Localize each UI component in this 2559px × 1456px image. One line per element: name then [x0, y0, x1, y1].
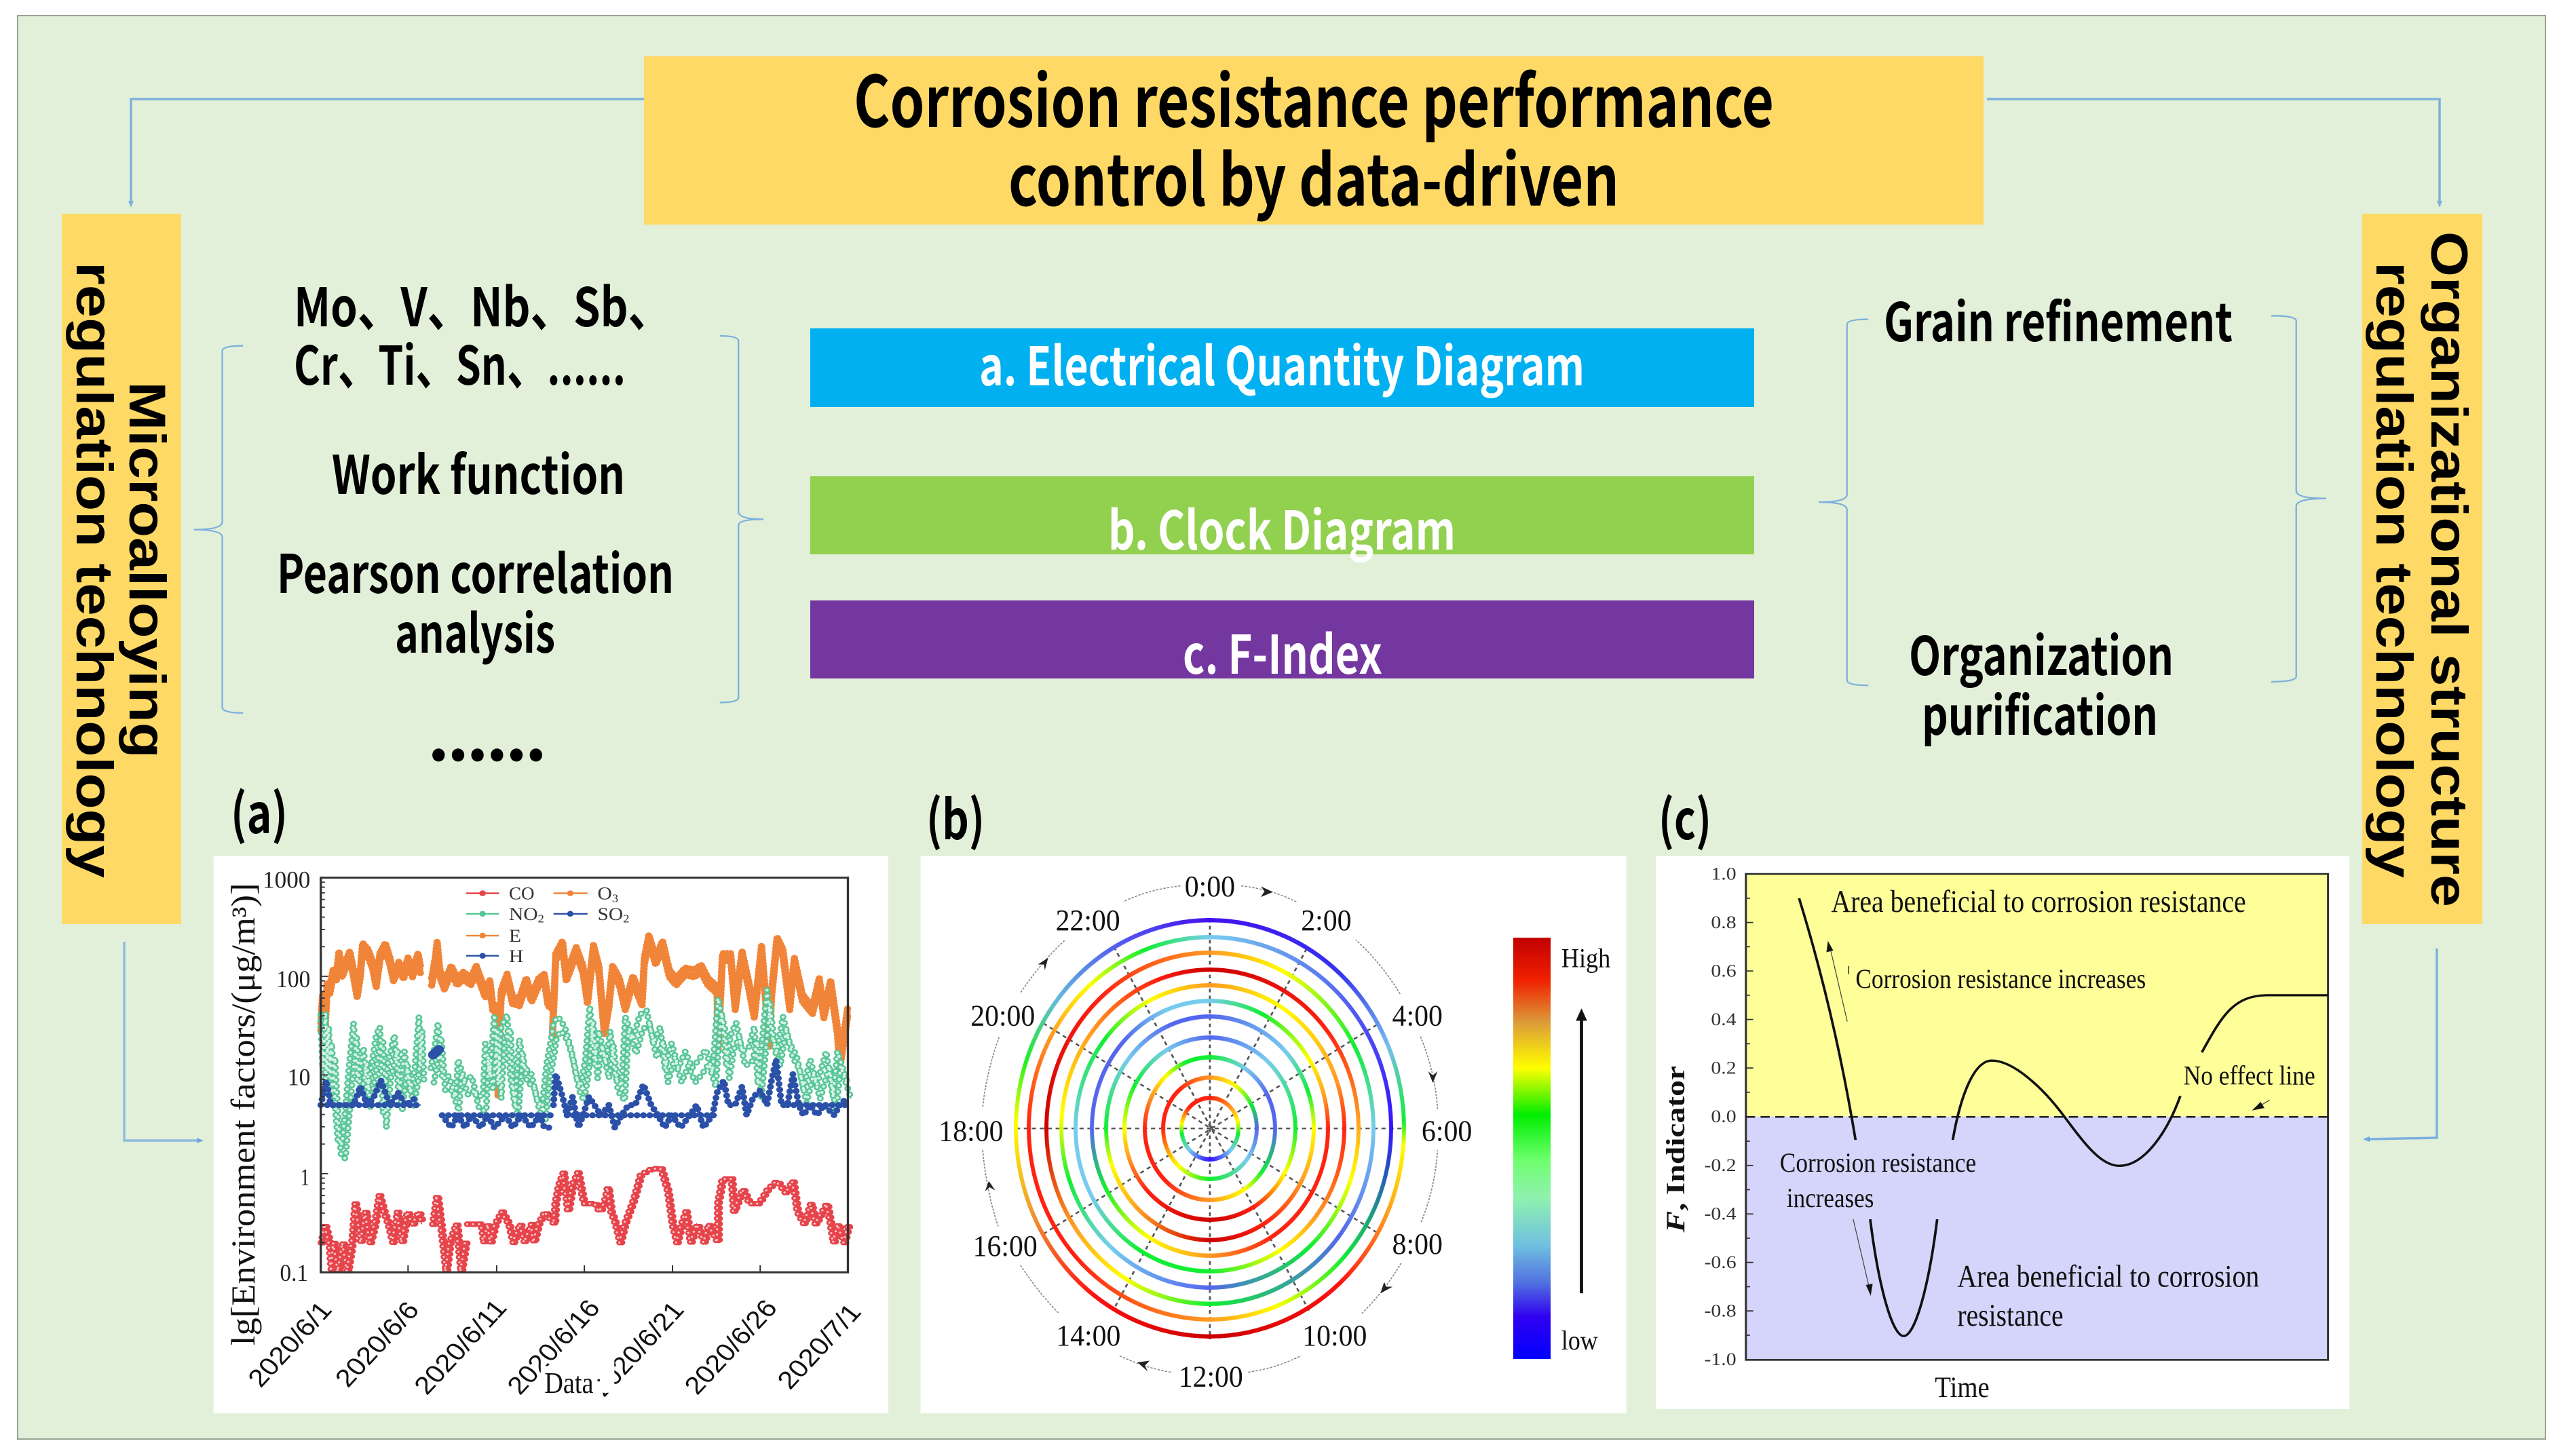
bar: clock diagram: b. Clock Diagram	[1108, 489, 1456, 565]
beneficial area lavender	[1746, 1117, 2328, 1360]
x axis title	[541, 1356, 614, 1400]
text block: microalloying factors: Pearson correlation	[277, 533, 674, 609]
legend: 3	[612, 892, 618, 904]
left brace group	[193, 336, 763, 713]
x tick labels: 2020/6/21	[586, 1297, 690, 1402]
clock labels: 18:00	[939, 1114, 1003, 1148]
x axis title: Data	[544, 1366, 594, 1400]
color bar	[1513, 938, 1551, 1359]
annotations: resistance	[1957, 1298, 2064, 1333]
legend	[466, 884, 630, 966]
text block: microalloying factors: analysis	[395, 592, 555, 668]
title banner: control by data-driven	[1008, 123, 1619, 226]
y tick labels: 0.2	[1711, 1058, 1737, 1078]
annotations: Corrosion resistance	[1780, 1148, 1976, 1178]
clock labels: 6:00	[1422, 1114, 1472, 1148]
x tick labels: 2020/6/11	[409, 1295, 513, 1400]
y axis title: F, Indicator	[1661, 1066, 1691, 1233]
color bar labels: low	[1561, 1326, 1598, 1356]
legend: SO	[598, 904, 623, 925]
y ticks	[1746, 898, 1754, 1335]
clock labels	[939, 870, 1472, 1394]
clock labels: 8:00	[1392, 1227, 1443, 1261]
y tick labels: -0.6	[1705, 1253, 1737, 1273]
left bar: microalloying regulation technology: Microalloying	[118, 381, 176, 759]
axis ticks	[321, 882, 760, 1272]
text block: microalloying factors: ......	[428, 682, 547, 780]
panel: chart a	[214, 856, 888, 1413]
clock labels: 10:00	[1302, 1319, 1367, 1352]
y tick labels	[1705, 864, 1737, 1370]
clock labels: 22:00	[1056, 904, 1120, 937]
y axis title: lg[Environment factors/(μg/m³)]	[225, 883, 263, 1345]
right bar: organizational structure regulation technology: regulation technology	[2365, 262, 2423, 878]
bar: electrical quantity diagram: a. Electrical Quantity Diagram	[979, 325, 1585, 401]
text block: organizational factors: Organization	[1909, 615, 2174, 691]
clock labels: 14:00	[1056, 1319, 1120, 1352]
legend: 2	[538, 912, 544, 925]
right brace group	[1819, 315, 2326, 685]
y tick labels: 0.4	[1711, 1010, 1737, 1030]
panel: chart c F indicator	[1656, 856, 2349, 1409]
legend: CO	[509, 884, 534, 904]
text block: organizational factors	[1884, 281, 2233, 750]
beneficial area yellow	[1746, 874, 2328, 1117]
arrow: microalloying to chart a	[124, 942, 204, 1143]
color bar labels	[1561, 944, 1610, 1356]
text block: microalloying factors: Mo、V、Nb、Sb、	[294, 266, 671, 342]
O3 and E series	[321, 935, 848, 1096]
annotations: Area beneficial to corrosion resistance	[1832, 884, 2246, 919]
arrow: organizational structure to chart c	[2363, 949, 2437, 1142]
legend: O	[598, 884, 612, 904]
bar: F-index: c. F-Index	[1183, 613, 1382, 689]
legend: 2	[623, 912, 630, 925]
annotations	[1780, 884, 2315, 1403]
y tick labels: 100	[276, 965, 310, 993]
text block: microalloying factors: Work function	[332, 434, 625, 510]
y tick labels: 0.6	[1711, 961, 1737, 981]
legend: NO	[509, 904, 538, 925]
y tick labels: -0.2	[1705, 1156, 1737, 1176]
CO series	[321, 1169, 851, 1271]
annotations: Corrosion resistance increases	[1855, 964, 2146, 994]
label (a): (a)	[231, 771, 288, 849]
clock labels: 20:00	[970, 999, 1035, 1033]
y tick labels	[263, 866, 310, 1287]
annotation arrows	[1827, 942, 2270, 1295]
text block: organizational factors: Grain refinement	[1884, 281, 2233, 357]
clock labels: 4:00	[1392, 999, 1443, 1033]
text block: microalloying factors	[277, 266, 674, 780]
color bar arrow	[1576, 1008, 1587, 1293]
outer dashed time arcs	[983, 886, 1437, 1372]
clock labels: 12:00	[1179, 1360, 1243, 1394]
x tick labels: 2020/6/16	[501, 1295, 606, 1400]
clock labels: 16:00	[973, 1229, 1038, 1263]
left bar: microalloying regulation technology	[62, 214, 181, 924]
frame	[1746, 874, 2328, 1360]
F curve	[1799, 898, 2328, 1336]
annotations: No effect line	[2184, 1060, 2315, 1091]
clock spokes	[1016, 919, 1406, 1339]
x tick labels: 2020/6/1	[242, 1297, 338, 1392]
y tick labels: -1.0	[1705, 1350, 1737, 1370]
y tick labels: 0.8	[1711, 913, 1737, 933]
annotations: Time	[1935, 1371, 1990, 1403]
y tick labels: 0.1	[280, 1260, 308, 1287]
right bar: organizational structure regulation technology	[2362, 214, 2482, 924]
title banner: Corrosion resistance performance	[854, 45, 1774, 147]
y tick labels: 10	[288, 1064, 310, 1091]
x tick labels: 2020/6/26	[679, 1295, 783, 1400]
color bar labels: High	[1561, 944, 1610, 974]
y tick labels: 1.0	[1711, 864, 1737, 884]
arrow: title to organizational structure	[1987, 99, 2442, 208]
NO2 series	[321, 990, 851, 1158]
annotations: Area beneficial to corrosion	[1957, 1259, 2259, 1294]
clock rings	[1014, 918, 1406, 1339]
legend: E	[509, 926, 521, 946]
x tick labels	[242, 1295, 867, 1402]
SO2 and H series	[321, 1050, 848, 1128]
bar: F-index	[810, 600, 1754, 689]
x tick labels: 2020/7/1	[772, 1299, 867, 1394]
label (c): (c)	[1658, 777, 1711, 856]
text block: organizational factors: purification	[1922, 674, 2158, 750]
y tick labels: 1	[301, 1164, 309, 1191]
axes frame	[321, 878, 848, 1272]
y tick labels: 1000	[263, 866, 310, 894]
y tick labels: 0.0	[1711, 1107, 1737, 1127]
bar: clock diagram	[810, 476, 1754, 565]
clock labels: 0:00	[1185, 870, 1235, 903]
left bar: microalloying regulation technology: regulation technology	[65, 262, 123, 878]
y tick labels: -0.8	[1705, 1301, 1737, 1321]
label (b): (b)	[926, 777, 985, 856]
time arc arrowheads	[985, 886, 1437, 1371]
x tick labels: 2020/6/6	[329, 1297, 425, 1392]
title banner	[644, 45, 1984, 226]
no effect line	[1746, 1115, 2328, 1118]
y tick labels: -0.4	[1705, 1204, 1737, 1224]
text block: microalloying factors: Cr、Ti、Sn、......	[294, 324, 626, 400]
arrow: title to microalloying	[128, 99, 644, 208]
clock labels: 2:00	[1301, 904, 1352, 937]
panel: chart b clock diagram	[921, 856, 1627, 1413]
annotations: increases	[1787, 1183, 1874, 1213]
legend: H	[509, 946, 523, 966]
right bar: organizational structure regulation technology: Organizational structure	[2420, 231, 2478, 907]
